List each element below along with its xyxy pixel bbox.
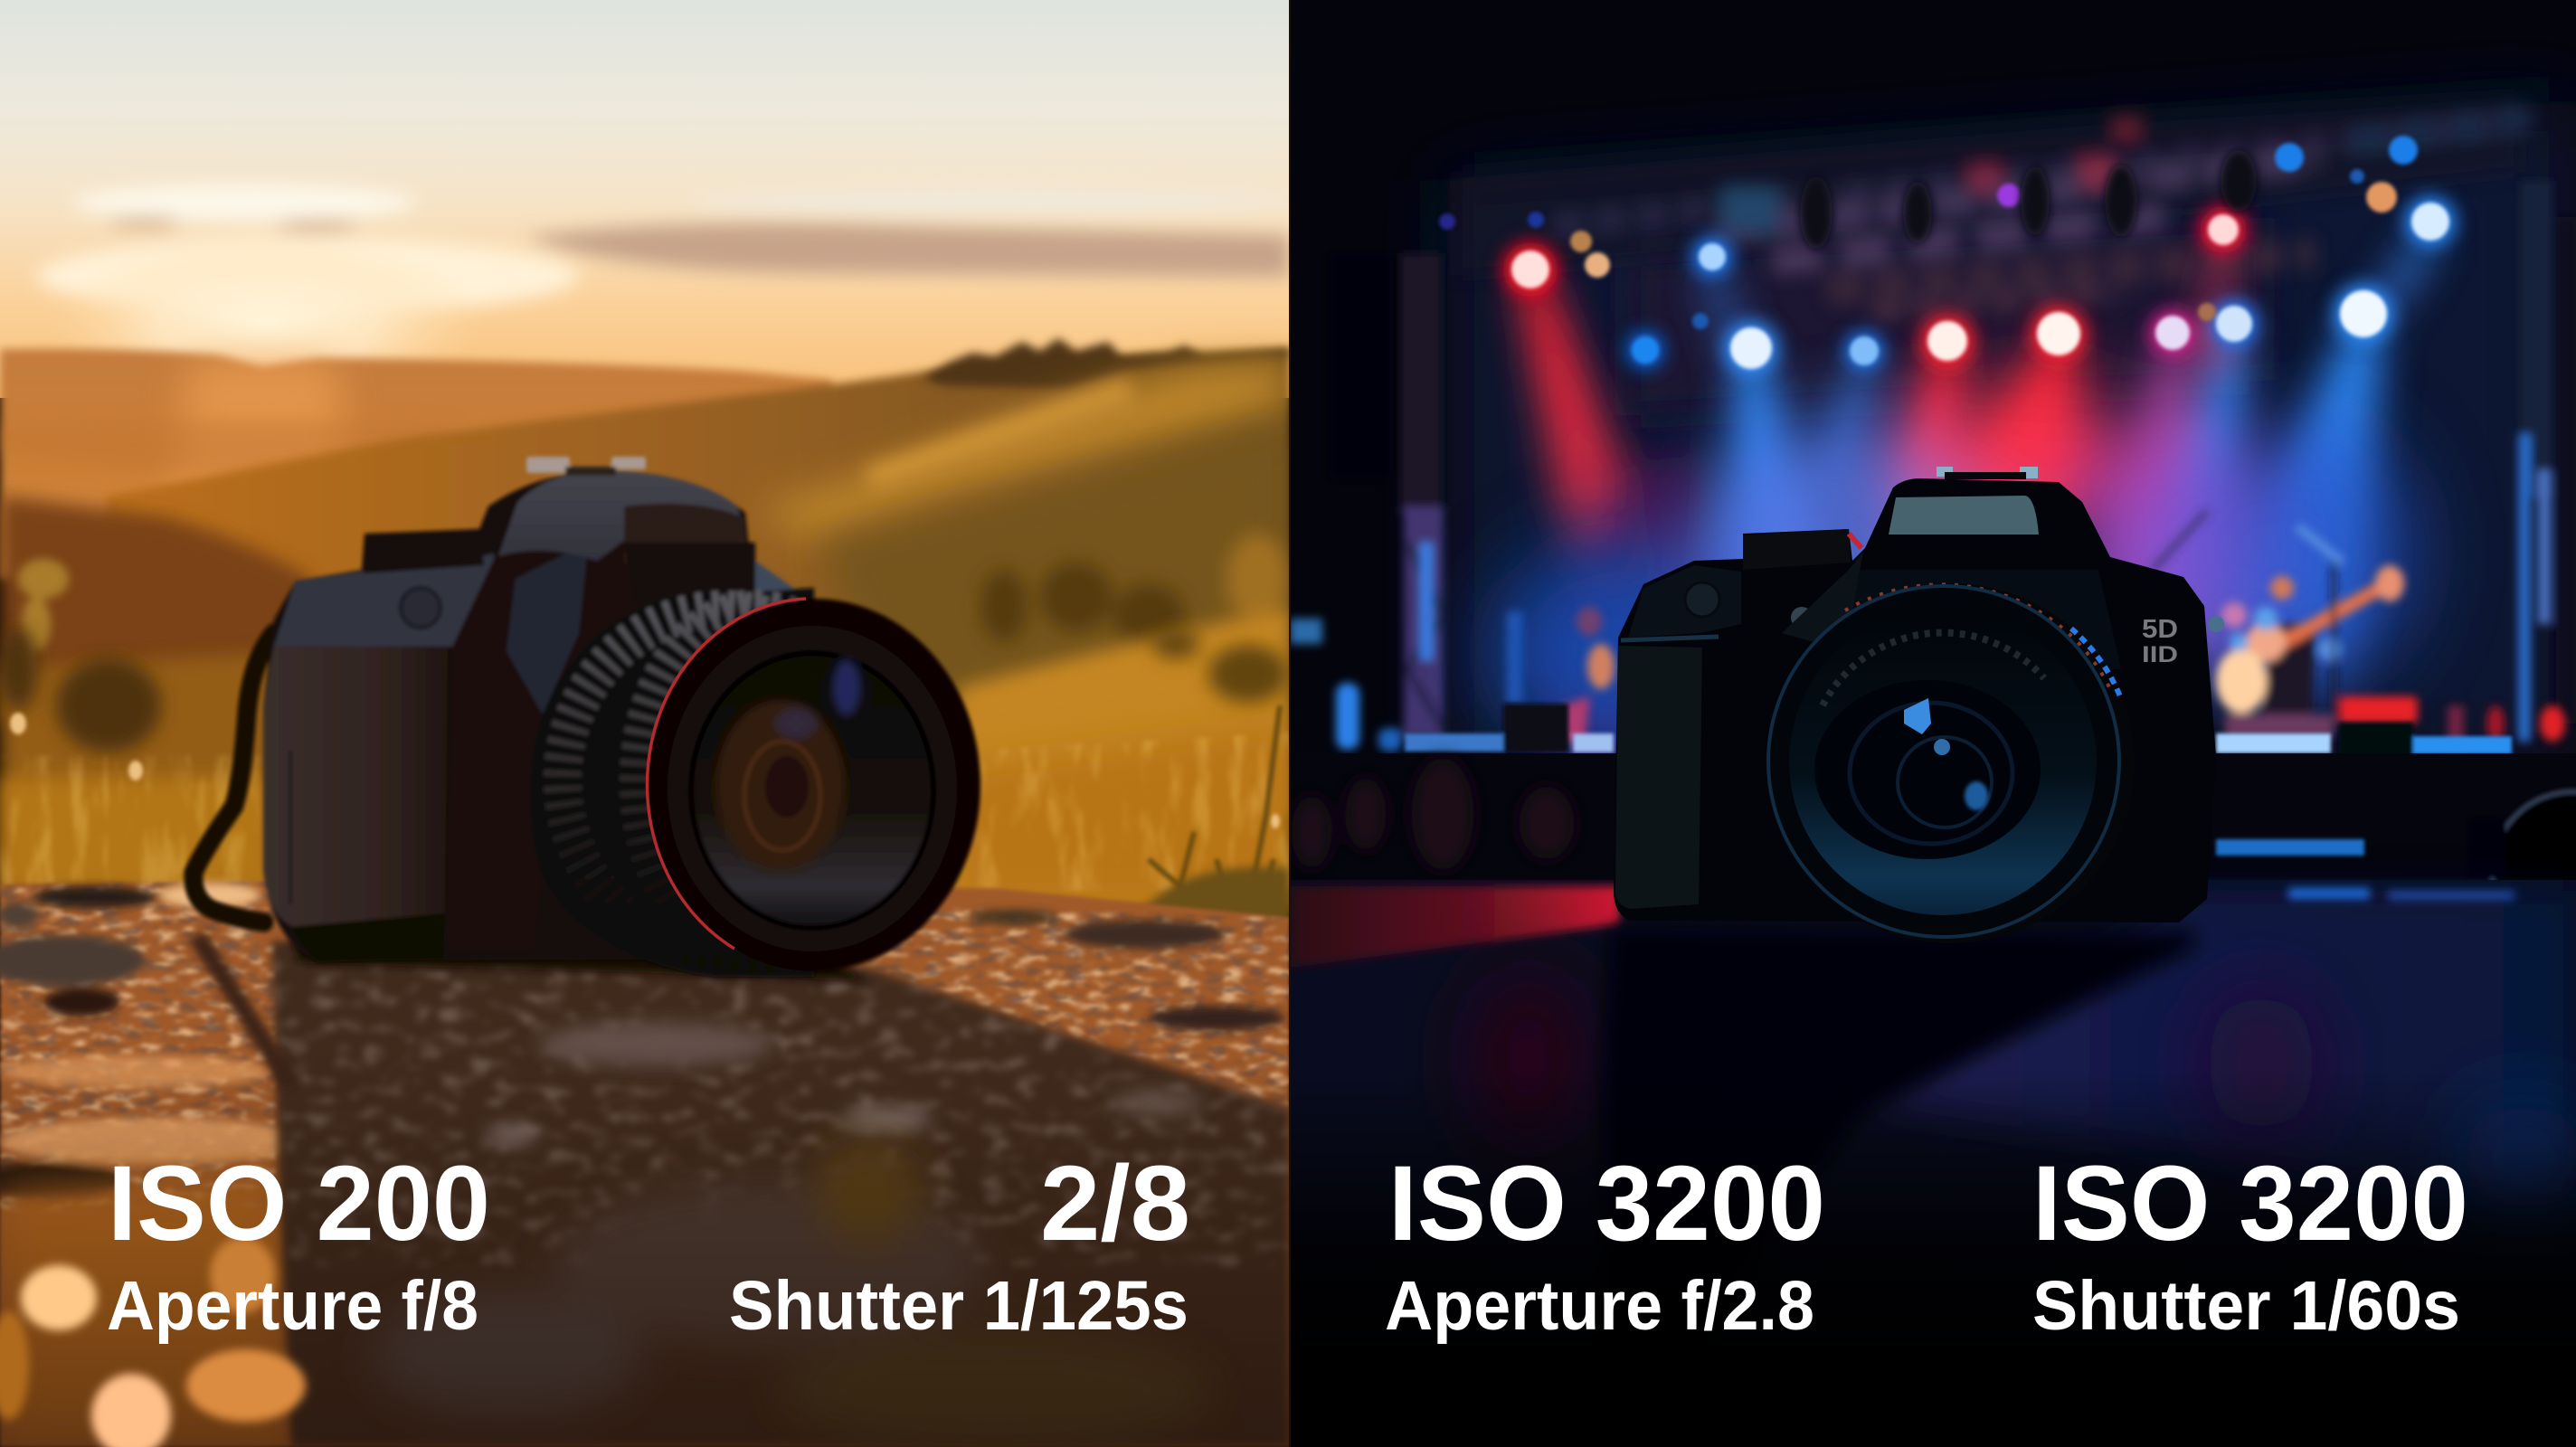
- light glows: [1503, 196, 2456, 375]
- viewfinder window: [1889, 496, 2039, 534]
- camera: DSLR silhouette on stage: [1614, 467, 2224, 943]
- model badge: 5D: [2142, 615, 2178, 644]
- grass field left: [0, 651, 312, 895]
- tree line on ridge: [923, 338, 1290, 389]
- red lens ring: [647, 599, 806, 949]
- far hills: [0, 349, 832, 579]
- camera body: [263, 470, 832, 960]
- lens front: [648, 599, 980, 971]
- light cores: [1439, 136, 2449, 369]
- sunlit right hill: [756, 361, 1290, 543]
- lower strip light: [2216, 839, 2364, 856]
- label: ISO 3200 left: ISO 3200: [1388, 1144, 1825, 1263]
- right tree cluster: [980, 563, 1185, 646]
- left shoulder: [1628, 565, 1741, 638]
- hot shoe: [1937, 467, 1953, 477]
- label: Aperture f/2.8: Aperture f/2.8: [1385, 1267, 1814, 1345]
- control button: [401, 588, 440, 628]
- lens bevel: [1789, 608, 2097, 915]
- left dark speaker: [1330, 253, 1393, 479]
- blurred foreground: [371, 1140, 1212, 1447]
- camera shadow on floor: [1601, 927, 2198, 1447]
- right shoulder: [755, 561, 800, 606]
- lens body: [1768, 586, 2119, 937]
- stage edge light strips: [1405, 704, 2512, 757]
- hanging fixtures: [1800, 150, 2257, 249]
- sunset sky: [0, 0, 1290, 398]
- body front panel: [448, 534, 755, 950]
- stage lights: [1439, 136, 2456, 375]
- hot shoe: [526, 457, 570, 473]
- truss overhead: [1456, 95, 2533, 312]
- top plate: [274, 553, 507, 647]
- right truss tower: [2518, 181, 2576, 742]
- strap lug: [2208, 616, 2224, 632]
- rocks: [0, 886, 1285, 1031]
- label: Aperture f/8: Aperture f/8: [107, 1267, 478, 1345]
- left shrub: [18, 559, 69, 687]
- lower left orange foreground: [0, 1176, 289, 1447]
- camera: DSLR in sunset: [194, 457, 980, 977]
- label: Shutter 1/60s: Shutter 1/60s: [2032, 1267, 2460, 1345]
- audience silhouettes: [1292, 758, 1574, 870]
- blurred foreground stones: [486, 1023, 1203, 1144]
- grass streaks: [0, 733, 1290, 891]
- strap shadow: [197, 936, 291, 1085]
- band on stage: [1563, 511, 2565, 751]
- lens inner ring: [668, 626, 957, 951]
- grass tuft: [1149, 705, 1280, 909]
- control button: [1685, 582, 1719, 617]
- mode dial: [365, 529, 484, 573]
- lens outer ring: [1766, 583, 2135, 943]
- panel: concert stage scene (ISO 3200): [1290, 0, 2576, 1447]
- dark stage front band: [1290, 753, 2576, 883]
- floor light glints: [2288, 888, 2514, 900]
- golden field right: [941, 608, 1290, 913]
- mode dial: [1743, 529, 1851, 570]
- bokeh highlights: [0, 1237, 306, 1447]
- stage back wall: [1447, 99, 2576, 760]
- lens barrel: [529, 588, 814, 977]
- lens reflections: [1904, 698, 1931, 734]
- lens glass: [1814, 680, 2041, 859]
- sunlit ground speckle: [0, 882, 1290, 1212]
- grip base: [289, 913, 445, 962]
- light beams: [1518, 235, 2440, 778]
- bright grass specks: [10, 713, 1280, 828]
- camera strap: [194, 633, 274, 922]
- dark background: [1290, 0, 2576, 1447]
- haze low on stage: [1492, 389, 2415, 760]
- sun glow: [83, 249, 450, 368]
- focus ring ribs inner: [638, 608, 873, 955]
- sunlit patches on ground: [0, 883, 308, 1198]
- model badge: [2142, 615, 2178, 667]
- dark foreground hill left: [0, 496, 312, 724]
- grip seam: [289, 751, 291, 904]
- dark vignette behind text: [0, 1040, 1290, 1447]
- dark fade behind text: [1290, 1067, 2576, 1447]
- red edge highlight: [1849, 534, 1861, 548]
- floor reflections: [1290, 886, 1621, 968]
- clouds: [36, 184, 1302, 314]
- focus ring ribs outer: [563, 610, 885, 950]
- right foreground wheel: [2469, 791, 2576, 954]
- camera body: [1614, 478, 2216, 922]
- floor: [1290, 880, 2576, 1447]
- rocky ground: [0, 882, 1290, 1447]
- lens glass: [691, 653, 933, 928]
- hand grip: [263, 644, 448, 932]
- label: ISO 200: ISO 200: [108, 1144, 490, 1263]
- contact shadow under camera: [289, 941, 868, 981]
- model badge: IID: [2142, 642, 2178, 667]
- lens engraving: [1823, 633, 2044, 705]
- lens rim reflection dots: [1845, 584, 2109, 687]
- camera shadow on ground: [271, 941, 1290, 1447]
- panel: sunset scene (ISO 200): [0, 0, 1302, 1447]
- grip: [1615, 646, 1702, 909]
- left truss tower: [1290, 253, 1523, 752]
- mid hills: [107, 348, 1290, 814]
- body panel under prism: [1845, 570, 2121, 669]
- label: ISO 3200 right: ISO 3200: [2032, 1144, 2468, 1263]
- centre divider line: [1289, 0, 1291, 1447]
- label: Shutter 1/125s: Shutter 1/125s: [729, 1267, 1189, 1345]
- pentaprism hump: [498, 470, 745, 561]
- label: 2/8: 2/8: [1040, 1144, 1190, 1263]
